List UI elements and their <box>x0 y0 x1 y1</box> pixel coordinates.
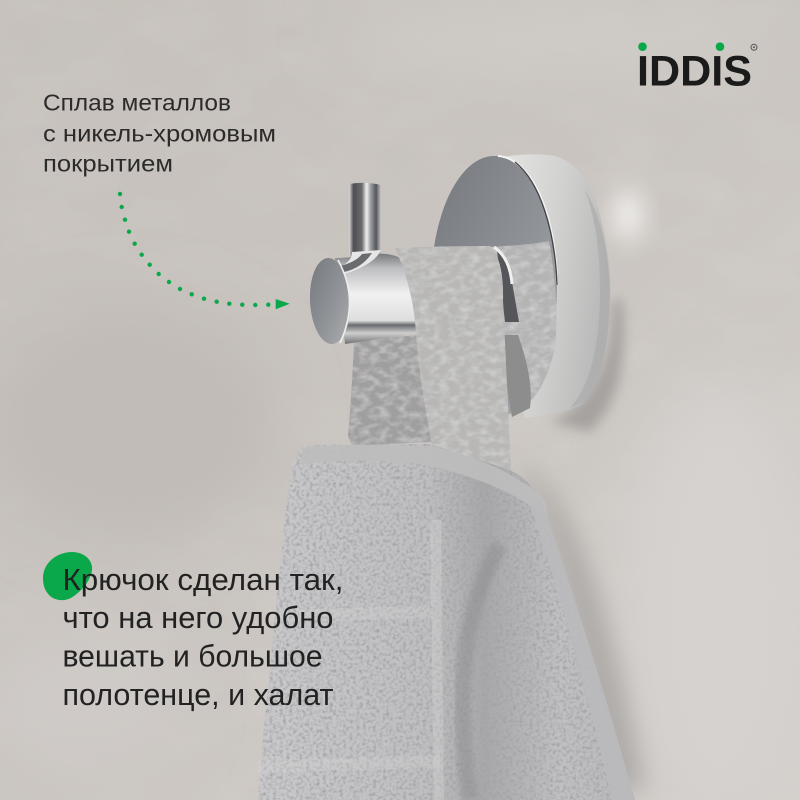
main caption: Крючок сделан так, <box>62 562 344 597</box>
callout text: material: покрытием <box>43 151 173 177</box>
arrow: dotted curve pointing to hook <box>118 192 290 309</box>
green accent blob <box>43 552 92 600</box>
main caption <box>62 562 344 712</box>
towel loop: back strand on plate <box>488 241 556 417</box>
callout text: material: Сплав металлов <box>43 90 231 116</box>
main caption: что на него удобно <box>62 600 334 635</box>
main caption: вешать и большое <box>62 638 322 674</box>
hook: barrel, peg and end cap <box>308 183 519 345</box>
main caption: полотенце, и халат <box>62 677 334 712</box>
callout text: material <box>43 90 276 177</box>
towel loop: hanging rear strand <box>348 335 432 446</box>
logo: IDDIS: IDDIS <box>637 48 752 96</box>
towel loop: front strand <box>395 246 511 470</box>
wall plate of hook <box>431 154 610 418</box>
towel body <box>258 444 635 800</box>
callout text: material: с никель-хромовым <box>43 121 276 147</box>
